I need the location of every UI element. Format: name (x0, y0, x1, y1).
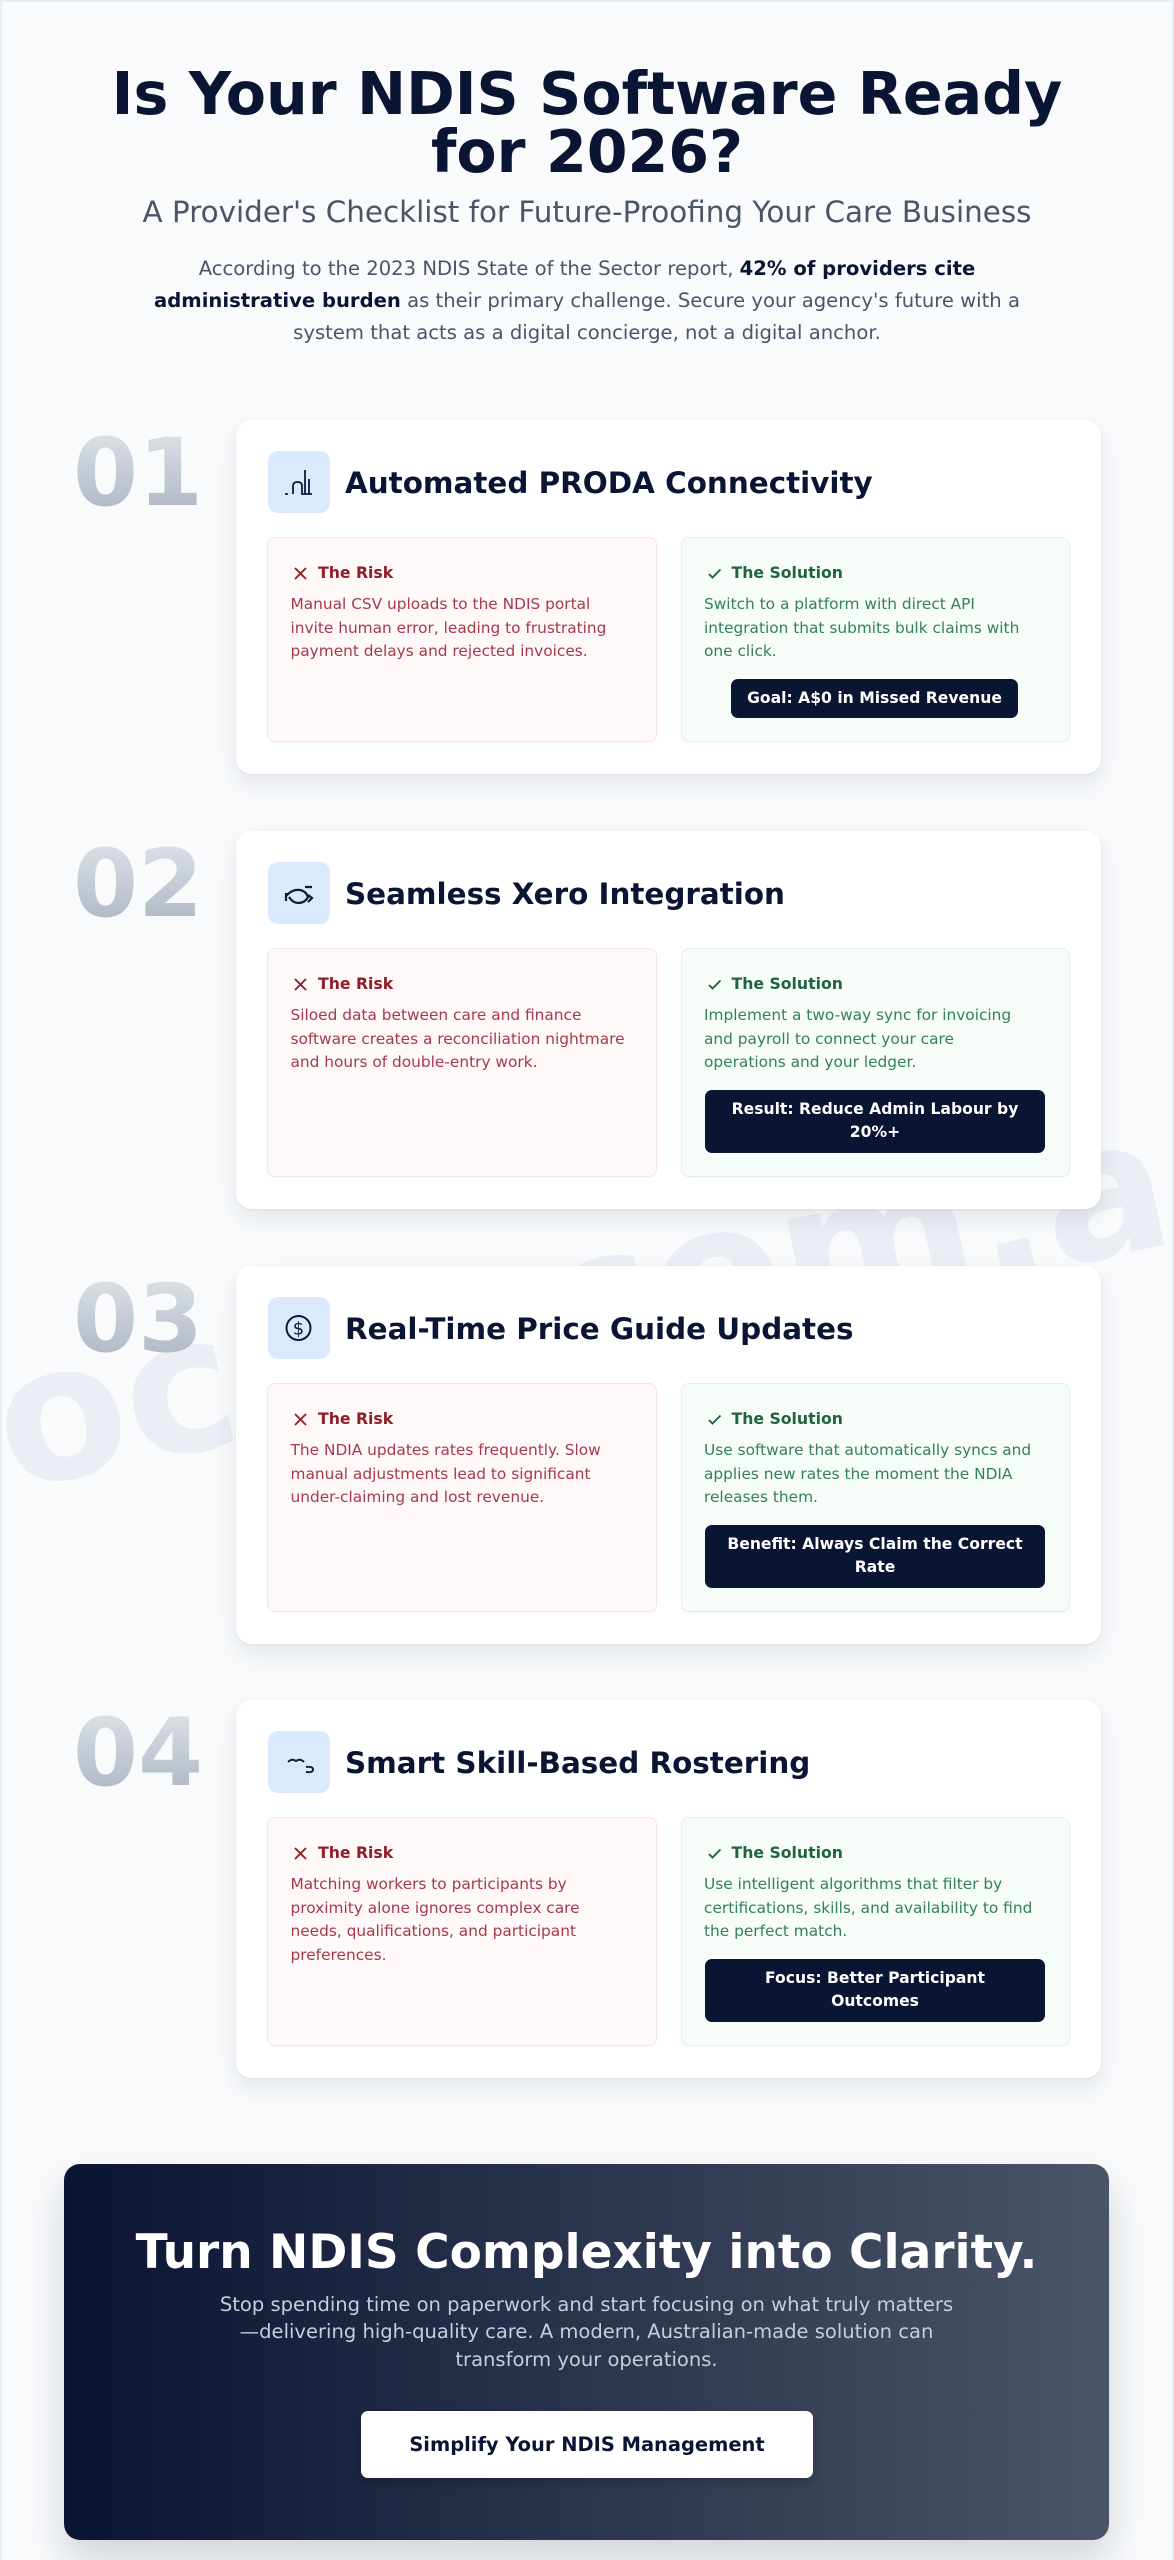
solution text: one click. (704, 642, 777, 660)
risk text (290, 595, 606, 660)
panel: solution (680, 1817, 1070, 2046)
heading: Real-Time Price Guide Updates (345, 1312, 854, 1346)
risk text (290, 1006, 625, 1071)
risk text: needs, qualifications, and participant (290, 1922, 576, 1940)
benefit badge: Benefit: Always Claim the Correct (727, 1535, 1023, 1553)
risk text: payment delays and rejected invoices. (290, 642, 588, 660)
icon: dollar coin (268, 1297, 330, 1359)
panel: risk (267, 948, 656, 1177)
CTA button: Simplify Your NDIS Management (409, 2433, 765, 2456)
solution text (704, 1875, 1032, 1940)
heading: Seamless Xero Integration (345, 877, 785, 911)
solution text: integration that submits bulk claims with (704, 618, 1019, 636)
solution text (704, 1006, 1011, 1071)
heading: Automated PRODA Connectivity (345, 466, 873, 500)
solution label: The Solution (732, 1843, 843, 1862)
step number 02: 02 (73, 830, 203, 939)
solution text: Use software that automatically syncs and (704, 1441, 1031, 1459)
heading: Smart Skill-Based Rostering (345, 1746, 810, 1780)
risk text: Manual CSV uploads to the NDIS portal (290, 595, 590, 613)
result badge: 20%+ (850, 1123, 900, 1141)
solution label: The Solution (732, 1409, 843, 1428)
risk label: The Risk (318, 563, 393, 582)
CTA heading: Turn NDIS Complexity into Clarity. (136, 2225, 1037, 2280)
risk text: manual adjustments lead to significant (290, 1464, 591, 1482)
solution text: Switch to a platform with direct API (704, 595, 975, 613)
icon: bar chart (268, 451, 330, 513)
panel: step 4 card (236, 1700, 1101, 2078)
risk text: The NDIA updates rates frequently. Slow (290, 1441, 601, 1459)
solution label: The Solution (732, 974, 843, 993)
solution text: Implement a two-way sync for invoicing (704, 1006, 1011, 1024)
result badge (705, 1090, 1045, 1153)
panel: solution (680, 537, 1070, 742)
title: for 2026? (431, 118, 743, 186)
solution text (704, 1441, 1031, 1506)
solution text: the perfect match. (704, 1922, 847, 1940)
result badge: Result: Reduce Admin Labour by (732, 1100, 1018, 1118)
risk text (290, 1875, 580, 1964)
solution text (704, 595, 1019, 660)
intro text: According to the 2023 NDIS State of the Sector report, 42% of providers cite (199, 256, 975, 280)
icon: handshake (268, 862, 330, 924)
title (112, 60, 1062, 186)
panel: risk (267, 537, 656, 742)
icon: rostering (268, 1731, 330, 1793)
subtitle: A Provider's Checklist for Future-Proofing Your Care Business (143, 195, 1031, 229)
risk label: The Risk (318, 974, 393, 993)
panel: call to action (64, 2164, 1109, 2540)
risk text: under-claiming and lost revenue. (290, 1488, 544, 1506)
goal badge (731, 679, 1018, 718)
step number 03: 03 (73, 1265, 203, 1374)
focus badge: Outcomes (831, 1992, 919, 2010)
CTA text: —delivering high-quality care. A modern, Australian-made solution can (240, 2320, 933, 2343)
solution label: The Solution (732, 563, 843, 582)
risk text: Matching workers to participants by (290, 1875, 567, 1893)
CTA button (361, 2411, 813, 2478)
risk label: The Risk (318, 1843, 393, 1862)
panel: step 3 card (236, 1266, 1101, 1644)
panel: step 2 card (236, 831, 1101, 1209)
CTA text: Stop spending time on paperwork and start focusing on what truly matters (220, 2292, 953, 2316)
risk text: and hours of double-entry work. (290, 1053, 537, 1071)
focus badge: Focus: Better Participant (765, 1969, 985, 1987)
icon: dollar coin: $ (293, 1318, 304, 1340)
CTA text: transform your operations. (455, 2348, 718, 2370)
goal badge: Goal: A$0 in Missed Revenue (747, 689, 1002, 707)
CTA text (220, 2292, 953, 2370)
solution text: operations and your ledger. (704, 1053, 916, 1071)
step number 04: 04 (73, 1699, 203, 1808)
step number 01: 01 (73, 419, 203, 528)
intro text: system that acts as a digital concierge, not a digital anchor. (293, 320, 881, 344)
risk text: invite human error, leading to frustrating (290, 618, 606, 636)
solution text: releases them. (704, 1488, 818, 1506)
title: Is Your NDIS Software Ready (112, 60, 1062, 128)
solution text: Use intelligent algorithms that filter by (704, 1875, 1002, 1893)
solution text: certifications, skills, and availability to find (704, 1898, 1032, 1916)
panel: solution (680, 1383, 1070, 1612)
solution text: and payroll to connect your care (704, 1030, 954, 1048)
intro text (154, 256, 1020, 344)
panel: risk (267, 1817, 656, 2046)
risk text (290, 1441, 601, 1506)
risk text: proximity alone ignores complex care (290, 1898, 580, 1916)
risk label: The Risk (318, 1409, 393, 1428)
panel: step 1 card (236, 420, 1101, 774)
intro text: administrative burden as their primary challenge. Secure your agency's future with a (154, 288, 1020, 312)
benefit badge: Rate (855, 1558, 895, 1576)
solution text: applies new rates the moment the NDIA (704, 1464, 1012, 1482)
risk text: Siloed data between care and finance (290, 1006, 581, 1024)
panel: solution (680, 948, 1070, 1177)
risk text: software creates a reconciliation nightmare (290, 1030, 625, 1048)
focus badge (705, 1959, 1045, 2022)
risk text: preferences. (290, 1946, 386, 1964)
benefit badge (705, 1525, 1045, 1588)
panel: risk (267, 1383, 656, 1612)
